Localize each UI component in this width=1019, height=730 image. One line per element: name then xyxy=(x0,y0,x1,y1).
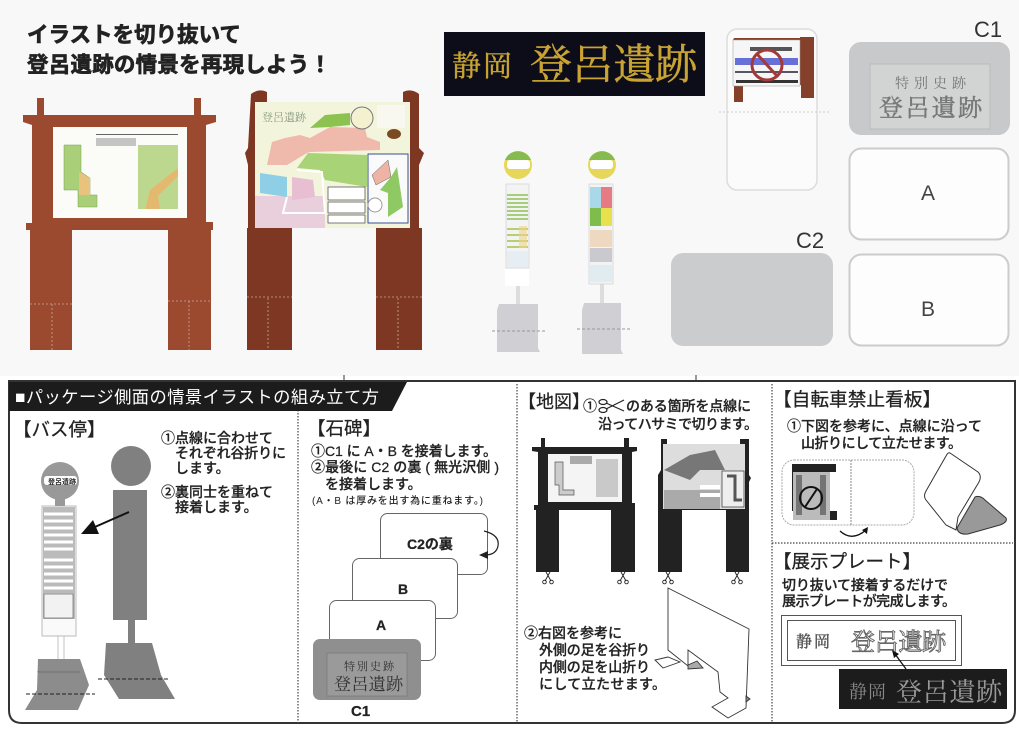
title xyxy=(27,23,331,77)
illustration: map board front xyxy=(23,98,216,350)
stacked cards: B xyxy=(398,581,408,597)
panel: assembly instructions xyxy=(9,375,1015,723)
banner: 静岡 登呂遺跡: 登呂遺跡 xyxy=(530,32,699,92)
icons: scissors below legs xyxy=(543,572,742,584)
section: bus stop xyxy=(13,419,286,710)
folded card xyxy=(924,453,1006,534)
section: stone monument: を接着します。 xyxy=(325,476,422,492)
section: bicycle ban sign: ①下図を参考に、点線に沿って xyxy=(787,418,982,434)
black plate: 静岡 xyxy=(849,678,886,704)
stacked cards: C2の裏 xyxy=(407,536,453,552)
stacked cards: 登呂遺跡 xyxy=(334,670,404,695)
section: bus stop: 接着します。 xyxy=(175,499,258,515)
stacked cards: A xyxy=(376,617,386,633)
cut-out: A card: A xyxy=(921,182,935,205)
section: stone monument: 【石碑】 xyxy=(307,418,381,439)
section: bus stop: それぞれ谷折りに xyxy=(175,445,286,461)
section: display plate: 【展示プレート】 xyxy=(773,551,921,572)
section: display plate xyxy=(773,551,1007,709)
section: bicycle ban sign: 【自転車禁止看板】 xyxy=(773,389,941,410)
stacked cards: 特別史跡 xyxy=(344,658,395,674)
cut-out: C1 card: C1 xyxy=(974,17,1002,42)
bus stop front diagram: 登呂遺跡 xyxy=(48,477,76,486)
title: 登呂遺跡の情景を再現しよう！ xyxy=(27,53,331,77)
section: stone monument: ①C1 に A・B を接着します。 xyxy=(311,443,497,459)
arrow xyxy=(892,650,906,669)
section: bicycle ban sign xyxy=(773,389,1006,536)
arrow xyxy=(81,512,129,534)
black plate xyxy=(839,669,1007,709)
plate outline: 静岡 xyxy=(796,629,830,652)
section: stone monument: (A・B は厚みを出す為に重ねます。) xyxy=(312,494,483,507)
banner: 静岡 登呂遺跡 xyxy=(444,32,705,96)
section: map: 沿ってハサミで切ります。 xyxy=(598,416,758,432)
cut-out: A card xyxy=(850,148,1008,240)
section: display plate: 切り抜いて接着するだけで xyxy=(782,577,948,593)
cut-out: bicycle ban sign xyxy=(719,29,829,190)
section: map: ① xyxy=(583,398,597,414)
fold card diagram xyxy=(782,460,914,536)
section: map: 内側の足を山折り xyxy=(539,659,650,675)
section: map: 【地図】 xyxy=(518,392,590,412)
stacked cards xyxy=(313,514,498,720)
cut-out: B card xyxy=(850,254,1008,346)
black map board back xyxy=(658,439,751,572)
section: bus stop: ②裏同士を重ねて xyxy=(161,484,273,500)
plate outline: 登呂遺跡 xyxy=(851,622,947,657)
section: map xyxy=(518,392,758,718)
header bar: ■パッケージ側面の情景イラストの組み立て方 xyxy=(15,387,379,407)
banner: 静岡 登呂遺跡: 静岡 xyxy=(452,44,512,85)
section: map: 外側の足を谷折り xyxy=(539,642,650,658)
section: bus stop: します。 xyxy=(175,460,230,476)
cut-out: bus stop front xyxy=(492,151,546,352)
bus stop front diagram xyxy=(25,462,95,710)
cut-out: C1 card xyxy=(849,17,1010,135)
illustration: map board back: 登呂遺跡 xyxy=(262,109,307,125)
section: map: ②右図を参考に xyxy=(524,625,622,641)
section: bus stop: 【バス停】 xyxy=(13,419,106,440)
section: bus stop: ①点線に合わせて xyxy=(161,430,273,446)
cut-out: C2 card: C2 xyxy=(796,228,824,253)
header bar xyxy=(9,382,407,411)
stacked cards: C1 xyxy=(351,703,370,720)
section: stone monument xyxy=(307,418,499,720)
black plate: 登呂遺跡 xyxy=(896,672,1003,709)
title: イラストを切り抜いて xyxy=(27,23,241,47)
cut-out: C1 card: 登呂遺跡 xyxy=(879,88,983,123)
folded stand diagram xyxy=(655,588,750,718)
cut-out: B card: B xyxy=(921,298,935,321)
plate outline xyxy=(782,616,962,666)
cut-out: C1 card: 特別史跡 xyxy=(895,73,967,93)
cut-out: bus stop back xyxy=(577,151,631,354)
section: display plate: 展示プレートが完成します。 xyxy=(782,593,956,609)
section: map: のある箇所を点線に xyxy=(626,398,751,414)
illustration: map board back xyxy=(245,90,424,350)
bus stop back diagram xyxy=(98,446,175,699)
section: bicycle ban sign: 山折りにして立たせます。 xyxy=(801,435,962,451)
black map board front xyxy=(532,438,637,572)
icon: scissors xyxy=(599,400,624,412)
cut-out: C2 card xyxy=(671,228,833,346)
section: stone monument: ②最後に C2 の裏 ( 無光沢側 ) xyxy=(311,459,499,475)
section: map: にして立たせます。 xyxy=(539,676,666,692)
